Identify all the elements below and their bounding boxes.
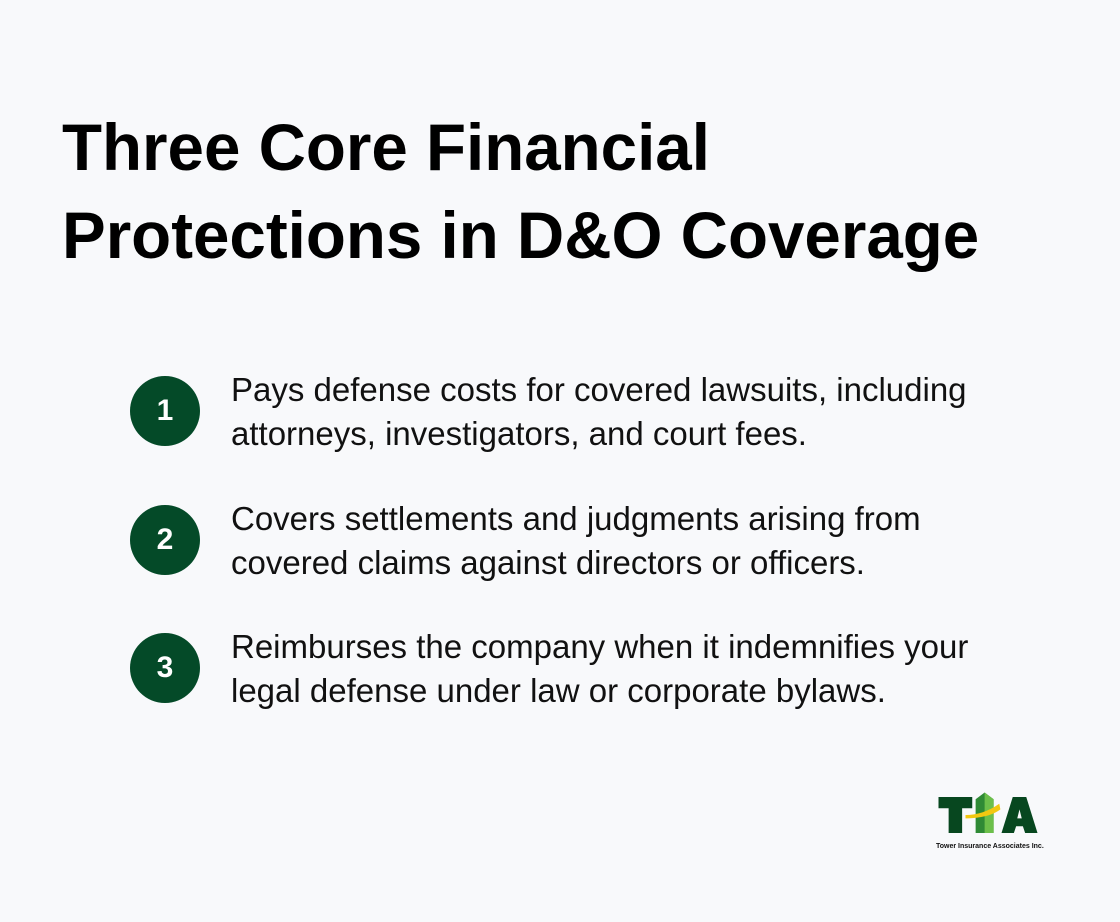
- title: [62, 111, 979, 272]
- item 3: [130, 628, 968, 709]
- item 2: [130, 500, 921, 581]
- text 3: [231, 628, 968, 709]
- text 2: [231, 500, 921, 581]
- badge 3: [130, 633, 200, 703]
- text 3: legal defense under law or corporate bylaws.: [231, 672, 886, 709]
- text 1: Pays defense costs for covered lawsuits, including: [231, 371, 967, 408]
- T: [938, 797, 972, 833]
- tower: [976, 792, 994, 833]
- A: [1002, 797, 1038, 833]
- text 2: Covers settlements and judgments arising from: [231, 500, 921, 537]
- item 1: [130, 371, 967, 452]
- text 2: covered claims against directors or officers.: [231, 544, 865, 581]
- logo text: Tower Insurance Associates Inc.: [936, 843, 1044, 850]
- text 1: attorneys, investigators, and court fees.: [231, 415, 807, 452]
- text 1: [231, 371, 967, 452]
- text 3: Reimburses the company when it indemnifies your: [231, 628, 968, 665]
- badge 2: [130, 505, 200, 575]
- title: Three Core Financial: [62, 111, 710, 184]
- badge 2: 2: [157, 523, 173, 556]
- title: Protections in D&O Coverage: [62, 199, 979, 272]
- logo: [936, 792, 1044, 850]
- badge 1: 1: [157, 394, 173, 427]
- badge 3: 3: [157, 651, 173, 684]
- badge 1: [130, 376, 200, 446]
